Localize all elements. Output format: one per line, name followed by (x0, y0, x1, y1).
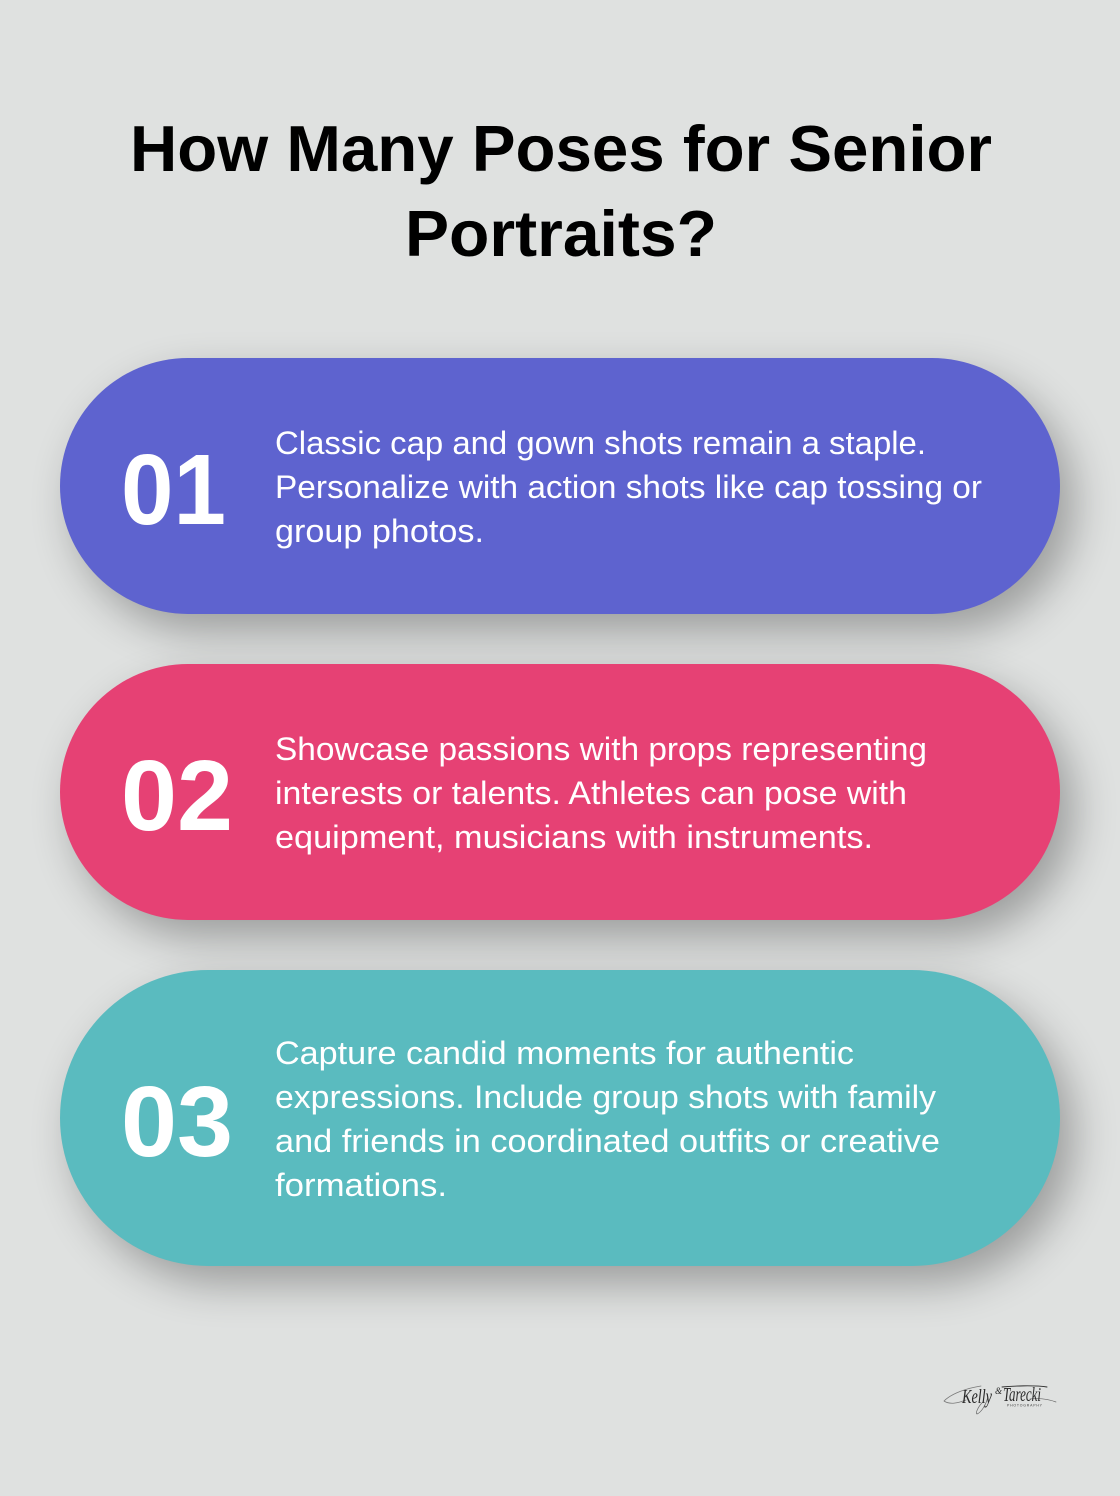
step 2 text: Showcase passions with props representing (275, 731, 927, 767)
panel: step 2 background (60, 664, 1060, 920)
step 1 text (275, 425, 982, 549)
logo: signature: & (995, 1386, 1002, 1396)
title: How Many Poses for Senior (130, 112, 992, 185)
panel: step 1 background (60, 358, 1060, 614)
step 2 number: 02 (121, 740, 233, 852)
step 3 text: formations. (275, 1167, 447, 1203)
step 3 text (275, 1035, 940, 1203)
step 1 text: Personalize with action shots like cap tossing or (275, 469, 982, 505)
step 1 text: Classic cap and gown shots remain a staple. (275, 425, 926, 461)
logo: signature: Tarecki (1003, 1384, 1041, 1406)
step 3 text: Capture candid moments for authentic (275, 1035, 854, 1071)
step 3 number: 03 (121, 1066, 233, 1178)
step 1 number: 01 (121, 434, 226, 546)
logo: signature: PHOTOGRAPHY (1007, 1404, 1043, 1408)
title (130, 112, 992, 270)
logo: signature (944, 1384, 1056, 1414)
panel: step 3 background (60, 970, 1060, 1266)
title: Portraits? (405, 197, 717, 270)
step 3 text: and friends in coordinated outfits or creative (275, 1123, 940, 1159)
step 3 text: expressions. Include group shots with family (275, 1079, 937, 1115)
step 1 text: group photos. (275, 513, 484, 549)
step 2 text (275, 731, 927, 855)
step 2 text: interests or talents. Athletes can pose with (275, 775, 907, 811)
step 2 text: equipment, musicians with instruments. (275, 819, 873, 855)
logo: signature: Kelly (961, 1386, 992, 1408)
